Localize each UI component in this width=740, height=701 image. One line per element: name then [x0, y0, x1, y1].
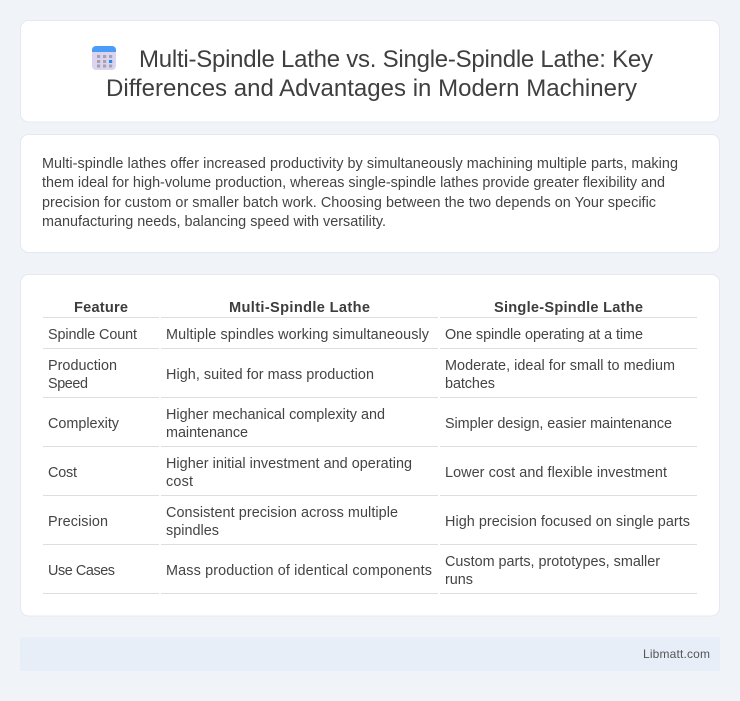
title: Multi-Spindle Lathe vs. Single-Spindle Lathe: Key	[139, 46, 653, 73]
intro text: precision for custom or smaller batch work. Choosing between the two depends on Your specific	[42, 195, 656, 211]
row: cost: Higher initial investment and operating	[166, 456, 412, 472]
row: production speed: Speed	[48, 376, 88, 392]
row: spindle count	[48, 327, 643, 343]
panel: header	[20, 20, 720, 122]
row: precision: High precision focused on single parts	[445, 514, 690, 530]
panel: intro paragraph	[20, 134, 720, 252]
row: precision: spindles	[166, 523, 219, 539]
intro text: manufacturing needs, balancing speed with versatility.	[42, 214, 386, 230]
row: use cases: runs	[445, 572, 473, 588]
row: production speed: Production	[48, 358, 117, 374]
row: precision	[48, 505, 690, 539]
title	[106, 46, 653, 102]
row: use cases: Use Cases	[48, 563, 115, 579]
row: spindle count: One spindle operating at a time	[445, 327, 643, 343]
table header row: Single-Spindle Lathe	[494, 300, 643, 316]
row: cost: cost	[166, 474, 193, 490]
row: complexity: maintenance	[166, 425, 248, 441]
table header row	[74, 300, 643, 316]
row: use cases: Mass production of identical components	[166, 563, 432, 579]
row: precision: Precision	[48, 514, 108, 530]
row: spindle count: Multiple spindles working simultaneously	[166, 327, 430, 343]
row: cost: Lower cost and flexible investment	[445, 465, 667, 481]
row: precision: Consistent precision across multiple	[166, 505, 398, 521]
row: use cases	[48, 554, 660, 588]
row: complexity: Simpler design, easier maintenance	[445, 416, 672, 432]
row: production speed: High, suited for mass production	[166, 367, 374, 383]
row: spindle count: Spindle Count	[48, 327, 137, 343]
row: production speed	[48, 358, 675, 392]
panel: comparison table	[20, 274, 720, 616]
intro text: Multi-spindle lathes offer increased productivity by simultaneously machining multiple parts, making	[42, 156, 678, 172]
table header row: Multi-Spindle Lathe	[229, 300, 370, 316]
intro text	[42, 156, 678, 230]
row: use cases: Custom parts, prototypes, smaller	[445, 554, 660, 570]
intro text: them ideal for high-volume production, whereas single-spindle lathes provide greater flexibility and	[42, 175, 665, 191]
row: complexity: Higher mechanical complexity and	[166, 407, 385, 423]
title: Differences and Advantages in Modern Machinery	[106, 75, 637, 102]
table header row: Feature	[74, 300, 128, 316]
footer	[20, 638, 720, 671]
row: production speed: Moderate, ideal for small to medium	[445, 358, 675, 374]
row: production speed: batches	[445, 376, 495, 392]
row: complexity: Complexity	[48, 416, 120, 432]
icon: calendar grid	[92, 46, 116, 70]
row: cost: Cost	[48, 465, 77, 481]
row: complexity	[48, 407, 672, 441]
footer: Libmatt.com	[643, 647, 710, 661]
row: cost	[48, 456, 667, 490]
